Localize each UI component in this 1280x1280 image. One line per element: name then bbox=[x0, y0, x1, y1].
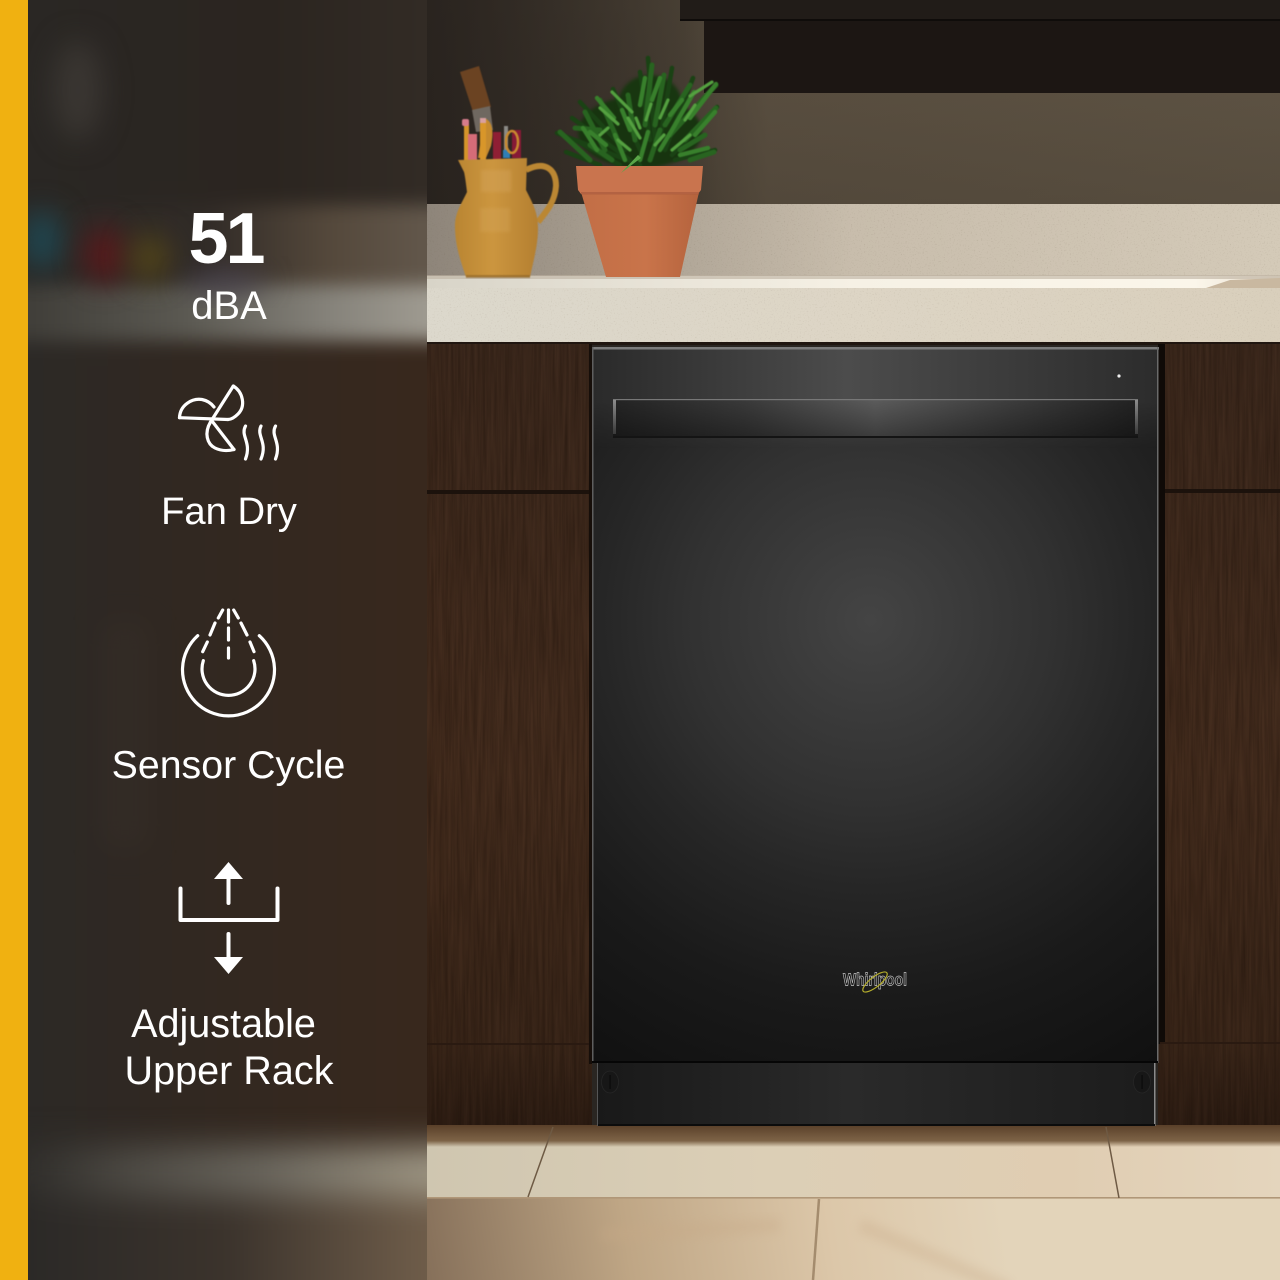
stat unit: dBA bbox=[191, 284, 267, 328]
pencils bbox=[462, 118, 521, 160]
label: Sensor Cycle bbox=[112, 743, 345, 787]
door handle bbox=[613, 399, 1138, 438]
Whirlpool logo: Whirlpool bbox=[843, 970, 907, 990]
kitchen scene bbox=[427, 0, 1280, 1280]
jug with pencils bbox=[455, 66, 556, 278]
handle bbox=[526, 166, 556, 222]
feature: fan dry bbox=[161, 386, 298, 533]
label: Fan Dry bbox=[161, 490, 298, 533]
foliage bbox=[557, 58, 717, 168]
blurred left panel bbox=[28, 48, 427, 1280]
stat number: 51 bbox=[188, 199, 264, 279]
backsplash bbox=[427, 204, 1280, 278]
yellow accent bar bbox=[0, 0, 28, 1280]
countertop bbox=[427, 275, 1280, 345]
icon: rack with up and down arrows bbox=[180, 862, 278, 974]
upper cabinet bbox=[680, 0, 1280, 93]
indicator light bbox=[1117, 374, 1121, 378]
door bbox=[592, 347, 1159, 1063]
brush bbox=[460, 66, 493, 158]
Whirlpool logo bbox=[843, 969, 907, 995]
feature: 51 dBA bbox=[188, 199, 267, 328]
feature: sensor cycle bbox=[112, 610, 345, 787]
kickplate bbox=[597, 1063, 1156, 1126]
potted plant bbox=[557, 58, 717, 277]
right cabinet bbox=[1158, 344, 1280, 1126]
pot body bbox=[581, 192, 699, 277]
label: Upper Rack bbox=[125, 1049, 334, 1093]
label: Adjustable bbox=[131, 1002, 316, 1046]
drooping leaf bbox=[621, 155, 641, 173]
body bbox=[455, 158, 538, 277]
icon: sensor spray bbox=[182, 610, 274, 716]
feature: adjustable upper rack bbox=[125, 862, 334, 1093]
floor tiles bbox=[427, 1125, 1280, 1280]
pot rim bbox=[576, 166, 703, 194]
icon: fan with heat waves bbox=[180, 386, 277, 459]
dishwasher bbox=[592, 347, 1159, 1126]
left cabinet bbox=[427, 344, 592, 1126]
back wall bbox=[427, 0, 1280, 206]
